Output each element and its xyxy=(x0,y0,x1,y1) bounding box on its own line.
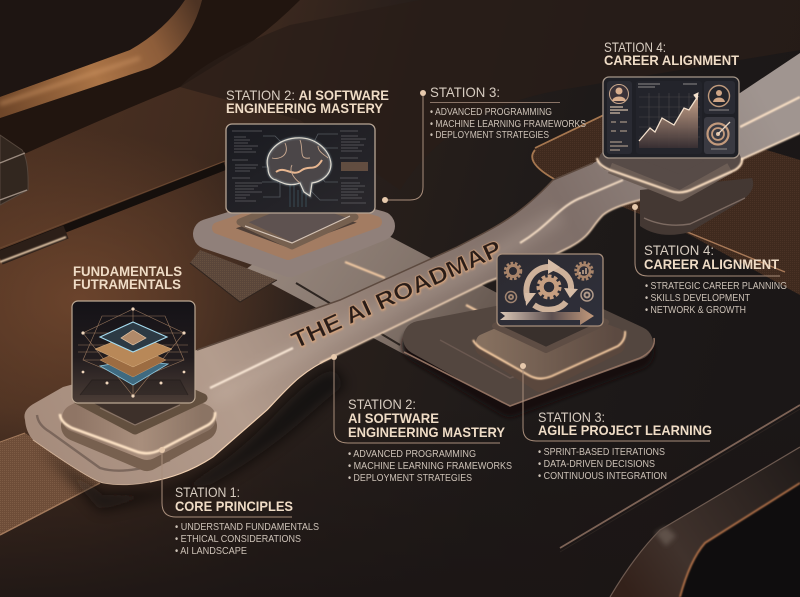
profile card xyxy=(704,81,735,114)
road: secondary crossing track xyxy=(245,205,520,368)
heading: fundamentals label: FUNDAMENTALS xyxy=(73,263,182,279)
text block: station 3 top: • ADVANCED PROGRAMMING xyxy=(430,106,552,118)
text block: station 2 lower: AI SOFTWARE xyxy=(348,410,439,426)
panel: station 1 holographic layers xyxy=(72,301,195,403)
text block: station 3 lower: STATION 3: xyxy=(538,409,605,425)
heading: fundamentals label xyxy=(73,263,182,292)
text block: station 1 core principles xyxy=(175,484,319,557)
strap: lower left fabric band xyxy=(0,433,100,535)
callout connector: station 3 lower xyxy=(520,363,710,441)
text block: station 1 core principles: STATION 1: xyxy=(175,484,240,500)
icon: center gear xyxy=(539,277,559,297)
back plate behind station 4 xyxy=(532,112,800,295)
icon: cycle arrows xyxy=(526,267,571,310)
text block: station 4 side: • NETWORK & GROWTH xyxy=(645,304,746,316)
pad: station 2 platform xyxy=(208,198,380,262)
text block: station 4 top heading xyxy=(604,39,739,68)
target card xyxy=(704,117,735,154)
road: main AI roadmap track xyxy=(24,53,800,510)
icon: stacked layers xyxy=(81,307,186,398)
text block: station 3 lower: • SPRINT-BASED ITERATIONS xyxy=(538,446,665,458)
panel: station 3 agile cycle xyxy=(497,254,603,326)
text block: station 1 core principles: CORE PRINCIPLES xyxy=(175,498,293,514)
text block: station 3 lower: • CONTINUOUS INTEGRATION xyxy=(538,470,667,482)
panel: station 2 brain dashboard xyxy=(226,124,375,213)
text block: station 2 lower xyxy=(348,396,512,484)
text block: station 4 top heading: CAREER ALIGNMENT xyxy=(604,52,739,68)
text block: station 2 top heading: ENGINEERING MASTERY xyxy=(226,100,384,116)
text block: station 2 lower: • ADVANCED PROGRAMMING xyxy=(348,448,476,460)
text block: station 3 top: • MACHINE LEARNING FRAMEWORKS xyxy=(430,118,586,130)
text block: station 4 side: CAREER ALIGNMENT xyxy=(644,256,779,272)
icon: small left dial xyxy=(506,292,516,302)
text block: station 2 lower: • MACHINE LEARNING FRAMEWORKS xyxy=(348,460,512,472)
text block: station 1 core principles: • UNDERSTAND FUNDAMENTALS xyxy=(175,521,319,533)
text block: station 2 top heading: STATION 2: AI SOFTWARE xyxy=(226,87,389,103)
text block: station 3 lower xyxy=(538,409,712,482)
icon: arrow heads xyxy=(525,259,578,306)
text block: station 4 side: STATION 4: xyxy=(644,242,714,258)
pad: station 1 platform xyxy=(60,368,215,456)
text block: station 2 lower: STATION 2: xyxy=(348,396,416,412)
pad: station 4 pedestal xyxy=(597,135,753,235)
text block: station 2 top heading xyxy=(226,87,389,116)
text block: station 1 core principles: • AI LANDSCAPE xyxy=(175,545,247,557)
text block: station 1 core principles: • ETHICAL CONSIDERATIONS xyxy=(175,533,301,545)
callout connector: station 4 side xyxy=(632,204,780,276)
title: the AI roadmap: THE AI ROADMAP xyxy=(287,235,505,354)
text block: station 4 top heading: STATION 4: xyxy=(604,39,666,55)
icon: wireframe lattice xyxy=(78,309,188,396)
panel: station 4 career dashboard xyxy=(603,77,739,158)
text block: station 3 lower: • DATA-DRIVEN DECISIONS xyxy=(538,458,655,470)
strap: station 2 fabric band xyxy=(190,250,277,302)
line chart xyxy=(636,81,702,154)
heading: fundamentals label: FUTRAMENTALS xyxy=(73,276,181,292)
icon: top-left gear xyxy=(506,264,520,278)
text-like list lines: right xyxy=(340,131,366,203)
pad: station 3 platform xyxy=(404,300,654,406)
sidebar profile xyxy=(607,81,632,154)
text block: station 2 lower: • DEPLOYMENT STRATEGIES xyxy=(348,472,472,484)
text block: station 4 side: • SKILLS DEVELOPMENT xyxy=(645,292,750,304)
text-like list lines: left xyxy=(232,131,262,201)
callout connector: station 1 xyxy=(159,447,292,517)
text block: station 3 top xyxy=(430,84,586,141)
callout connector: station 2 lower xyxy=(331,354,500,443)
text block: station 2 lower: ENGINEERING MASTERY xyxy=(348,424,506,440)
text block: station 3 top: STATION 3: xyxy=(430,84,500,100)
icon: long arrow xyxy=(500,307,594,325)
callout connector: station 3 top xyxy=(382,90,560,203)
icon: top-right gear xyxy=(576,263,592,279)
connector lines xyxy=(262,134,338,207)
icon: small right dial xyxy=(581,289,593,301)
text block: station 3 top: • DEPLOYMENT STRATEGIES xyxy=(430,129,549,141)
text block: station 3 lower: AGILE PROJECT LEARNING xyxy=(538,422,712,438)
icon: brain xyxy=(267,138,331,196)
text block: station 4 side xyxy=(644,242,787,316)
